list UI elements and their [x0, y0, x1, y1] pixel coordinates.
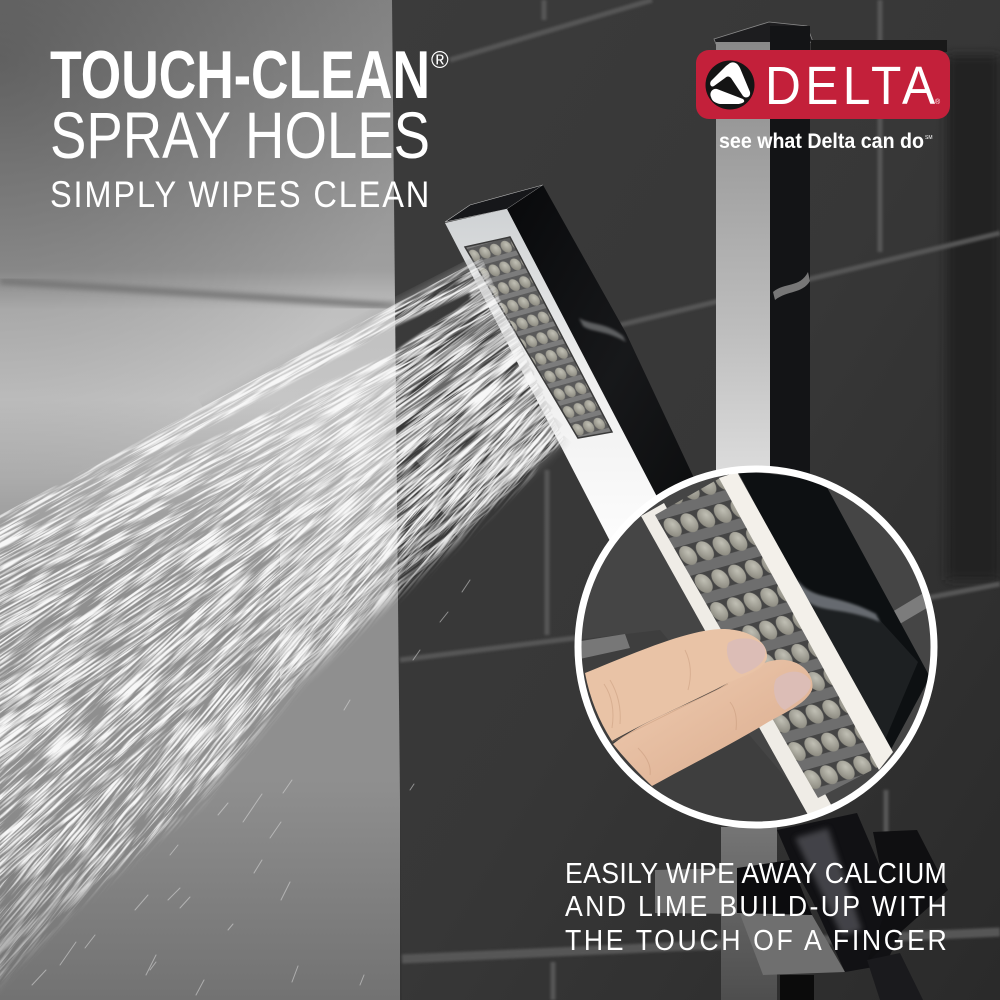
lower wall bracket and hose — [655, 813, 948, 1000]
head: top cap — [445, 185, 543, 222]
hose — [867, 953, 923, 1000]
lens: upper finger — [585, 629, 767, 741]
lens: lower fingernail — [774, 672, 811, 710]
magnified circle — [575, 469, 937, 830]
lens: left chrome strip — [641, 503, 834, 822]
bar: side highlight — [773, 272, 810, 300]
lens: finger wrinkles — [604, 650, 736, 775]
lens: lower side tone — [810, 604, 918, 738]
lens: side reflection — [796, 578, 880, 622]
water spray — [0, 258, 568, 1000]
logo: service mark: SM — [925, 135, 932, 141]
lens: upper fingernail — [727, 638, 765, 674]
bracket: tube highlight — [795, 828, 862, 936]
logo: black circle icon — [706, 60, 754, 110]
background: dark tile wall — [392, 0, 1000, 1000]
bar: chrome face — [716, 42, 770, 482]
title line 2: SPRAY HOLES — [50, 98, 430, 172]
Delta logo — [696, 50, 950, 153]
caption — [565, 857, 947, 956]
spray: upper streaks — [0, 258, 502, 640]
caption line 1: EASILY WIPE AWAY CALCIUM — [565, 857, 947, 889]
bracket: black recess — [737, 860, 812, 915]
bracket: grey plate — [655, 868, 845, 975]
registered mark: ® — [431, 47, 449, 74]
scattered droplets — [32, 580, 470, 995]
logo: wordmark: DELTA — [765, 55, 936, 115]
spray: lower middle streaks — [0, 350, 542, 885]
lens: wall highlight band — [582, 634, 630, 658]
head: nozzle panel — [465, 237, 612, 438]
hand shower head — [445, 185, 722, 570]
head: black side — [507, 185, 722, 560]
circle fill — [578, 469, 934, 825]
bracket: grey vertical bar — [721, 827, 777, 1000]
lens: black side — [737, 470, 930, 755]
circle white ring — [578, 469, 934, 825]
logo: registered mark: ® — [935, 98, 941, 106]
caption line 3: THE TOUCH OF A FINGER — [565, 924, 947, 956]
title line 1: TOUCH-CLEAN — [50, 37, 430, 113]
bar: rear block — [811, 40, 947, 52]
slide bar — [714, 22, 947, 482]
logo: red badge — [696, 50, 950, 119]
caption line 2: AND LIME BUILD-UP WITH — [565, 890, 947, 922]
lens: nozzle panel — [655, 478, 880, 798]
lens: right chrome strip — [719, 472, 893, 770]
spray: lower streaks — [0, 395, 565, 1000]
logo: tagline: see what Delta can do — [719, 130, 924, 153]
spray: jets near nozzles — [200, 262, 568, 556]
title — [50, 37, 449, 215]
spray: long streaks near head — [280, 258, 565, 700]
bar: top bevel — [714, 22, 813, 44]
bracket: black tube — [777, 813, 905, 972]
lens: wall lower tone — [575, 630, 830, 830]
bar foot — [780, 975, 814, 1000]
background: light grey shower wall — [0, 0, 400, 1000]
head: reflection on side — [579, 318, 626, 342]
bracket: block — [867, 830, 948, 962]
subtitle: SIMPLY WIPES CLEAN — [50, 174, 429, 215]
lens: wall highlight band right — [894, 594, 926, 624]
bar: black side — [770, 26, 810, 482]
spray: upper middle streaks — [0, 305, 522, 765]
lens: lower finger — [613, 660, 813, 786]
head: chrome front — [445, 209, 690, 570]
